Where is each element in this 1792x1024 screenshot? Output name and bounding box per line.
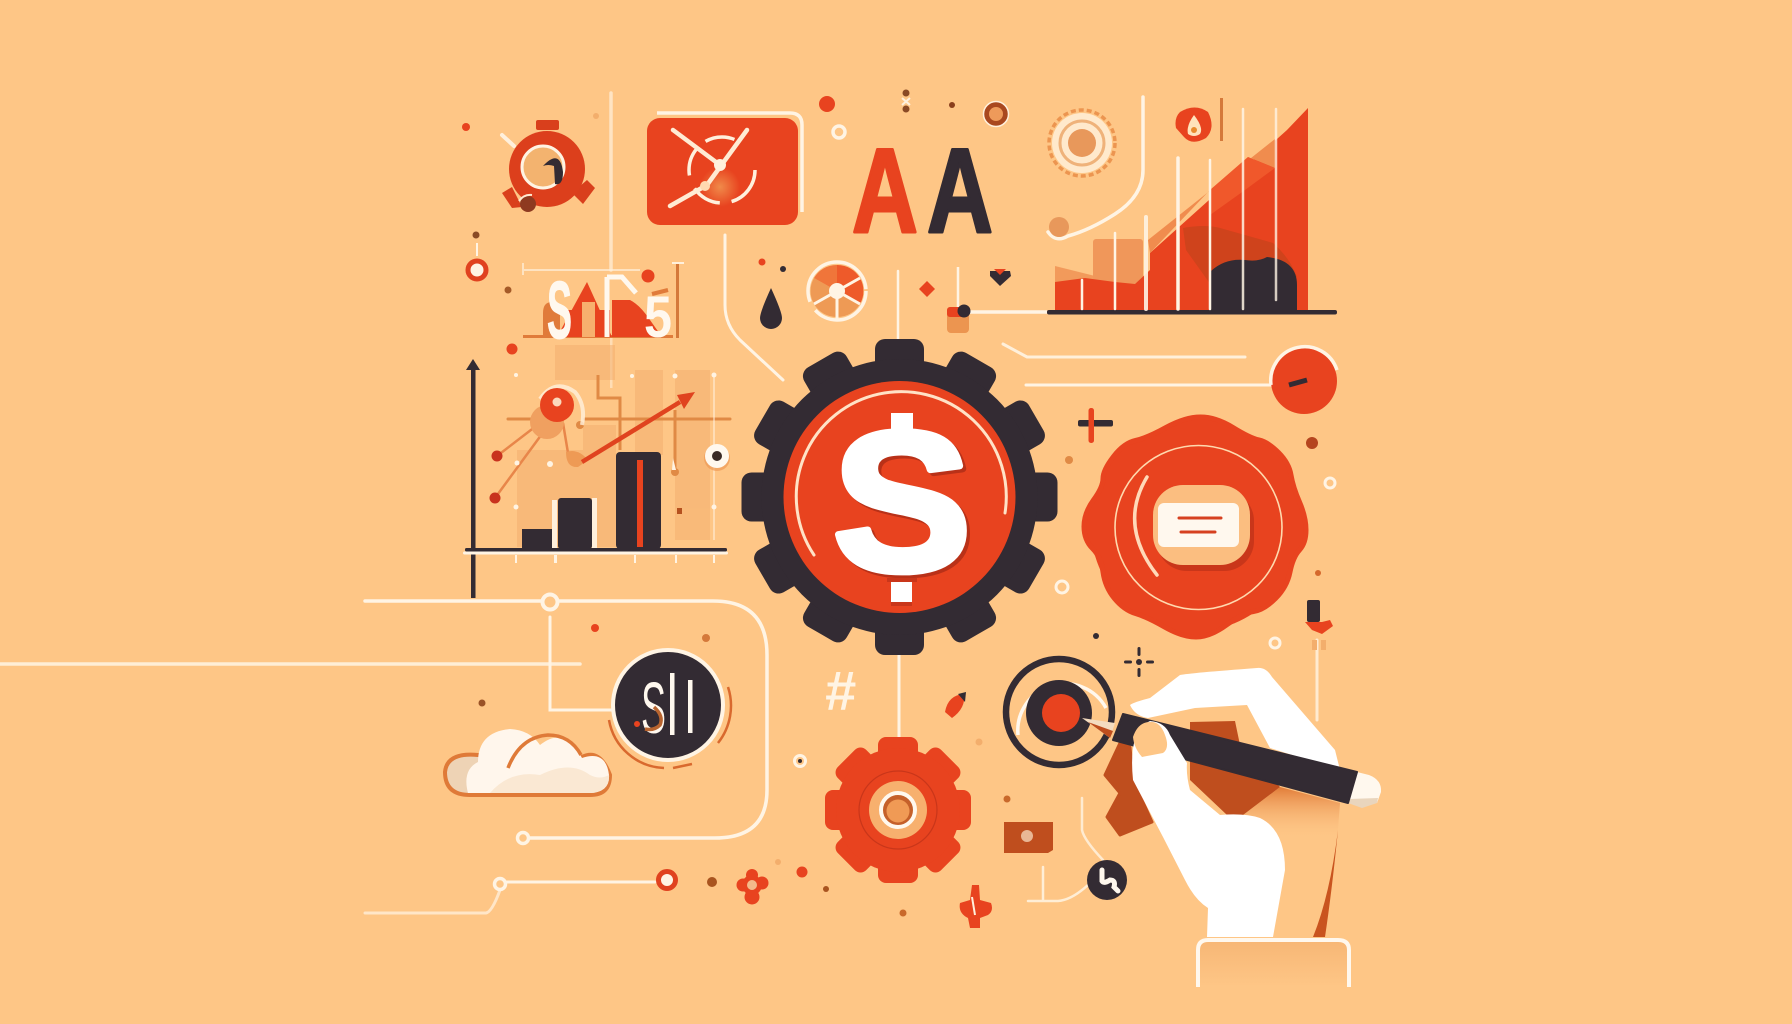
panel: stylised lettering: 5 <box>644 285 672 350</box>
small dots right of gear <box>1056 437 1335 648</box>
pen <box>1082 714 1381 808</box>
icon: crosshair <box>1124 647 1154 677</box>
heading: AA letters: A <box>852 124 918 258</box>
icon: top-left cog <box>502 120 595 212</box>
icon: main gear with dollar sign: $ <box>839 377 965 630</box>
illustration: hand holding pen <box>1082 668 1381 937</box>
heading: AA letters <box>852 124 993 258</box>
icon: main gear with dollar sign: S <box>833 392 971 613</box>
icon: main gear with dollar sign: S <box>836 395 974 616</box>
icon: sun badge <box>1049 110 1115 176</box>
small dots near badge <box>478 624 710 706</box>
icon: minus circle <box>1271 347 1337 414</box>
icon: red badge with card <box>1084 417 1306 637</box>
panel: stylised lettering <box>523 263 684 388</box>
chart: bar chart with trend arrow <box>463 345 730 598</box>
icon: main gear with dollar sign <box>742 339 1058 655</box>
icon: target <box>1006 659 1112 765</box>
icon: water drop <box>758 258 786 329</box>
index finger <box>1130 668 1340 770</box>
icon: SII circle badge: S <box>641 669 666 749</box>
panel: stylised lettering: S <box>547 265 572 356</box>
icon: flame badge <box>1176 98 1223 142</box>
icon: flower and dots <box>707 859 906 916</box>
icon: small bean and ring <box>794 692 1010 802</box>
icon: tower marker <box>1305 600 1333 650</box>
connector: curved line with dot <box>1048 97 1143 239</box>
icon: cloud <box>445 729 610 795</box>
icon: node on chart baseline <box>947 267 1047 333</box>
icon: money card <box>1004 822 1053 853</box>
icon: plus sign <box>1078 408 1113 443</box>
panel: red clock card <box>647 113 802 225</box>
icon: left pin <box>468 232 518 354</box>
icon: linked dark circle <box>1087 860 1127 900</box>
icon: ring nodes on lines <box>494 594 676 890</box>
connector lines <box>0 93 1317 913</box>
thumb nail <box>1133 722 1167 757</box>
heading: AA letters: A <box>927 124 993 258</box>
icon: SII circle badge <box>609 650 731 768</box>
icon: red cross ornament <box>960 885 992 928</box>
icon: pie wheel <box>808 262 866 320</box>
icon: hash symbol: # <box>824 659 856 722</box>
illustration: cuff <box>1198 940 1349 987</box>
icon: small bottom gear <box>825 737 971 883</box>
icon: small diamond and heart <box>919 269 1011 297</box>
chart: rising area chart <box>1047 108 1337 314</box>
icon: small top ornaments <box>462 90 1008 138</box>
thumb <box>1132 721 1285 937</box>
